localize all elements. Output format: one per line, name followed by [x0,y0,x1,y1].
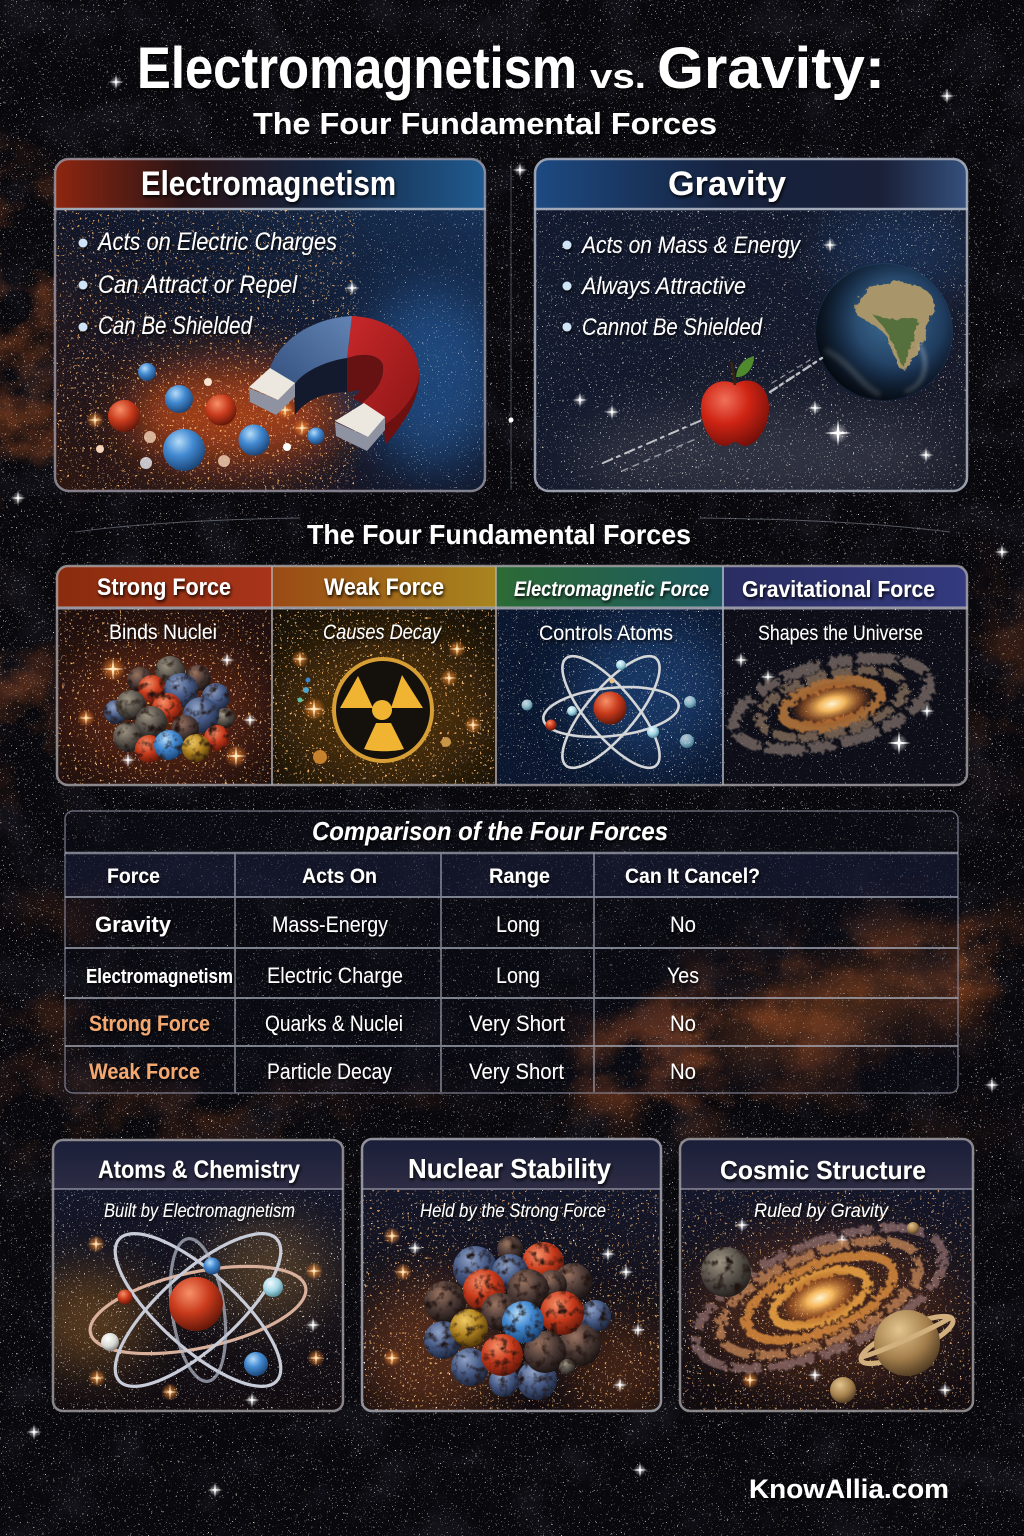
header: gravity: Gravity [668,165,786,203]
table row: electromagnetism: Electric Charge [267,963,403,988]
table row: electromagnetism: Yes [667,963,699,988]
panel: cosmic structure [677,1139,973,1411]
table row: gravity: No [670,912,696,937]
panel: gravity [534,159,980,500]
panel: nuclear stability: Held by the Strong Force [420,1201,606,1222]
table header row: Range [489,865,550,888]
panel: cosmic structure: Ruled by Gravity [754,1201,889,1222]
table row: strong force: Quarks & Nuclei [265,1011,403,1036]
table row: strong force: Strong Force [89,1011,210,1036]
icon: radiation symbol [334,659,432,761]
icon: falling apple [603,356,822,471]
panel: comparison table [65,811,958,1093]
panel: electromagnetism [54,159,500,491]
table row: weak force: Weak Force [89,1059,200,1084]
column: gravitational force: Gravitational Force [742,576,935,602]
table row: gravity: Long [496,912,540,937]
header: electromagnetism: Electromagnetism [141,165,396,203]
bullet list: electromagnetism: Can Attract or Repel [98,271,298,299]
bullet list: gravity: Always Attractive [580,273,746,300]
table header row [107,865,760,888]
column: weak force [272,566,496,790]
table row: gravity: Gravity [95,912,172,937]
table row: electromagnetism [86,963,699,988]
brand credit: KnowAllia.com [749,1474,949,1504]
bullet list: electromagnetism: Can Be Shielded [98,312,253,340]
icon: nucleus cluster large [424,1236,611,1400]
table row: weak force: No [670,1059,696,1084]
panel: cosmic structure: Cosmic Structure [720,1155,926,1185]
icon: earth [815,262,953,401]
icon: spiral galaxy [725,641,939,767]
panel: nuclear stability: Nuclear Stability [408,1153,611,1184]
bullet list: gravity: Cannot Be Shielded [582,314,763,341]
table header row: Force [107,865,160,888]
table row: weak force: Particle Decay [267,1059,392,1084]
section heading: four fundamental forces [75,518,950,550]
column: strong force [56,566,272,784]
table row: weak force [89,1059,696,1084]
column: weak force: Weak Force [324,574,444,601]
panel: atoms and chemistry: Built by Electromagnetism [104,1201,295,1222]
subtitle: The Four Fundamental Forces [253,106,717,141]
icon: horseshoe magnet [249,316,419,451]
column: gravitational force [724,566,968,784]
table row: gravity: Mass-Energy [272,912,388,937]
title [137,36,885,101]
table row: weak force: Very Short [469,1059,564,1084]
panel: atoms and chemistry [30,1140,343,1411]
column: weak force: Causes Decay [323,621,442,644]
column: electromagnetic force: Controls Atoms [539,622,673,645]
table row: electromagnetism: Electromagnetism [86,966,233,988]
title: Gravity: [657,36,885,101]
icon: spiral galaxy large [677,1198,963,1398]
column: electromagnetic force [496,566,730,784]
section heading: four fundamental forces: The Four Fundamental Forces [307,519,691,550]
centre divider [508,165,514,490]
icon: charged particles [86,363,324,471]
title: Electromagnetism [137,36,577,101]
table header row: Can It Cancel? [625,865,760,888]
column: strong force: Strong Force [97,574,231,601]
panel: four forces strip [56,566,968,790]
icon: atom large [83,1211,313,1409]
bullet list: electromagnetism [78,228,337,340]
icon: nucleus cluster [104,656,235,763]
header: electromagnetism [55,159,485,208]
icon: atom [522,643,696,781]
table row: strong force [89,1011,696,1036]
panel: atoms and chemistry: Atoms & Chemistry [98,1156,300,1184]
bullet list: gravity [562,232,802,341]
column: electromagnetic force: Electromagnetic Force [514,578,709,601]
header: gravity [535,159,967,208]
column: strong force: Binds Nuclei [109,621,217,644]
title: vs. [590,58,646,96]
table row: strong force: Very Short [469,1011,565,1036]
column: gravitational force: Shapes the Universe [758,622,923,645]
bullet list: gravity: Acts on Mass & Energy [580,232,802,259]
icon: planets [701,1222,958,1403]
table header row: Acts On [302,865,377,888]
table row: strong force: No [670,1011,696,1036]
table title: Comparison of the Four Forces [312,816,668,846]
table row: gravity [95,912,696,937]
bullet list: electromagnetism: Acts on Electric Charges [96,228,337,256]
table row: electromagnetism: Long [496,963,540,988]
panel: nuclear stability [360,1139,670,1420]
